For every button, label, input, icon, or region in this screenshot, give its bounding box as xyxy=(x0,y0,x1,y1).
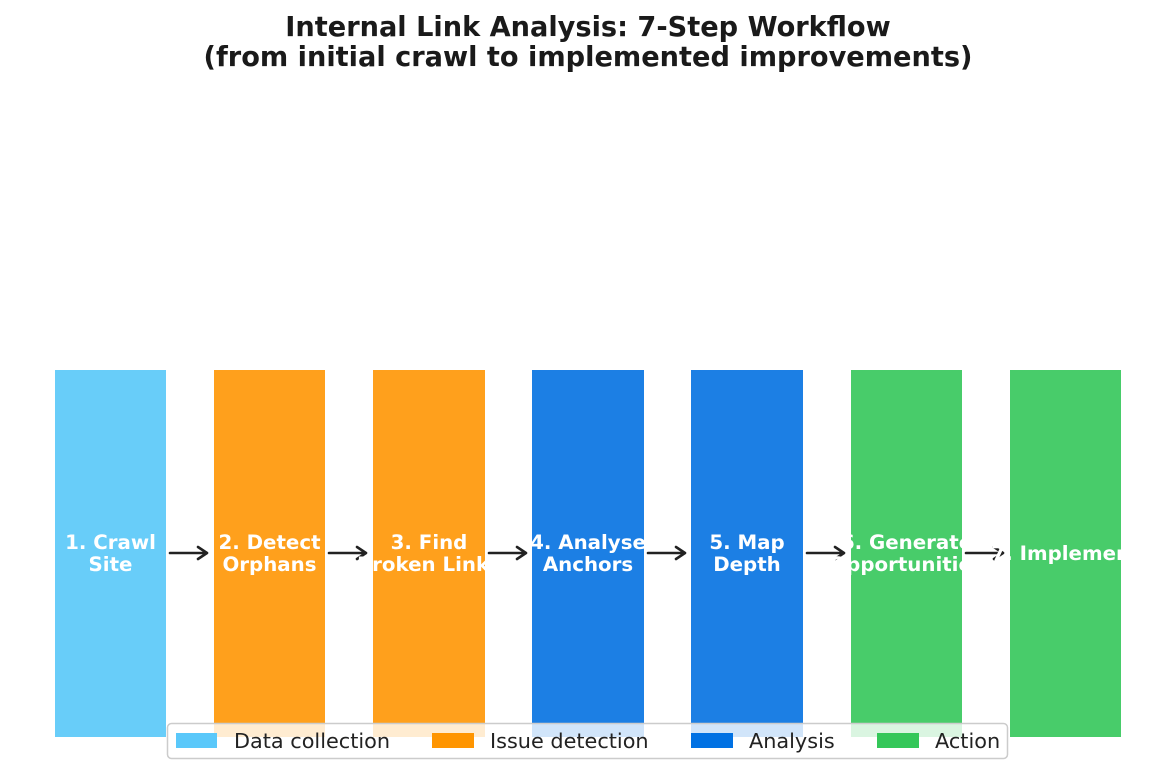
legend: Issue detection xyxy=(490,729,649,753)
legend xyxy=(168,724,1008,758)
legend: Analysis xyxy=(749,729,835,753)
step labels: 4. Analyse xyxy=(530,531,646,554)
legend: Action xyxy=(935,729,1000,753)
step labels: 1. Crawl xyxy=(65,531,156,554)
step labels xyxy=(65,531,1140,576)
step labels: 5. Map xyxy=(709,531,785,554)
step labels: Broken Links xyxy=(357,553,501,576)
title: (from initial crawl to implemented improvements) xyxy=(204,42,972,73)
step labels: 7. Implement xyxy=(991,542,1140,565)
step labels: 3. Find xyxy=(391,531,467,554)
step labels: Orphans xyxy=(222,553,317,576)
legend: Data collection xyxy=(234,729,390,753)
step labels: Depth xyxy=(713,553,781,576)
step labels: Anchors xyxy=(543,553,633,576)
bars xyxy=(55,370,1121,737)
title xyxy=(204,12,972,73)
step labels: 2. Detect xyxy=(218,531,321,554)
arrows xyxy=(170,547,1003,559)
step labels: Opportunities xyxy=(829,553,984,576)
title: Internal Link Analysis: 7-Step Workflow xyxy=(285,12,891,43)
step labels: 6. Generate xyxy=(841,531,972,554)
step labels: Site xyxy=(89,553,132,576)
